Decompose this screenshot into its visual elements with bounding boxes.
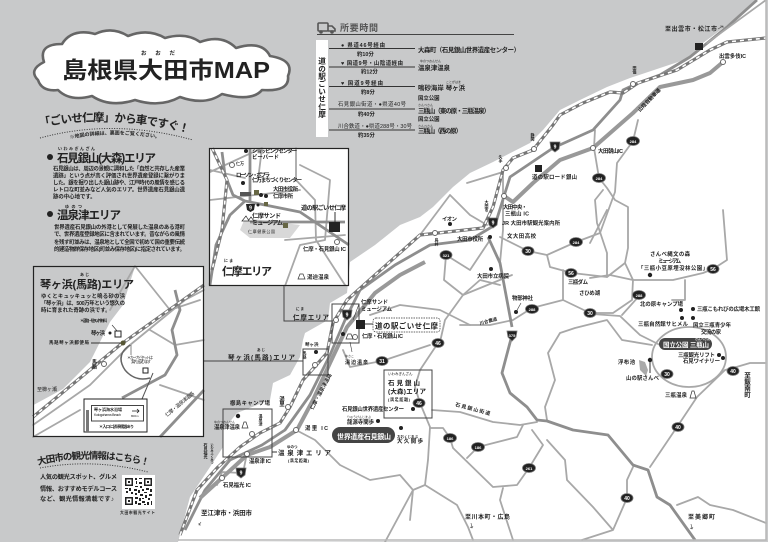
yunotsu labels: 至江津市・浜田市 — [201, 508, 252, 517]
route badges: 46 — [416, 401, 422, 407]
nima labels — [222, 147, 346, 281]
nima labels: 仁摩エリア — [222, 264, 272, 278]
panel: nima intro — [40, 112, 192, 253]
route badges: 56 — [568, 271, 574, 277]
iwami ginzan text: した。銀を掘り出した銀山跡や、江戸時代の風情を感じる — [53, 178, 185, 186]
oda labels: 久手 — [498, 154, 504, 164]
panel: kotogahama inset — [33, 266, 204, 437]
route badges: 9 — [554, 144, 557, 150]
route badges: 284 — [630, 139, 637, 144]
iwami ginzan area label: (満足距離) — [388, 396, 411, 402]
area locator boxes — [223, 304, 432, 457]
sanbe labels: ミュージアム — [658, 258, 682, 265]
nima labels: 仁摩サンド — [252, 212, 281, 220]
oda labels: 大田中央・ — [503, 203, 527, 211]
yunotsu text: 温泉津エリア — [57, 208, 121, 222]
iwami ginzan text: レトロな町並みなど人気のエリア。世界遺産石見銀山遺 — [53, 186, 186, 194]
origin column: 道の駅ごいせ仁摩 — [317, 56, 326, 119]
title ruby: おおだ — [141, 49, 175, 57]
oda labels: 至出雲市・松江市 — [665, 25, 717, 33]
sanbe labels: さんべ縄文の森 — [650, 250, 691, 258]
route 5: 川合鉄道・●県道288号・30号 — [338, 122, 413, 130]
kotogahama labels: ＊道路・駐P以外有料 — [80, 317, 107, 323]
route badges: 31 — [379, 359, 385, 365]
route badges: 375 — [509, 333, 516, 338]
connector lines — [204, 286, 332, 361]
tourism text: 人気の観光スポット、グルメ — [40, 473, 117, 481]
kotogahama callout: 800m — [131, 414, 139, 418]
nima labels: 道の駅ごいせ仁摩 — [301, 204, 346, 212]
route badges: 261 — [526, 466, 533, 471]
oda labels: 川合農道 — [479, 315, 498, 327]
sanbe labels — [618, 250, 761, 399]
kotogahama callout: ＊入口に誘導標識あり — [99, 423, 134, 429]
nima labels: 仁摩市所 — [273, 192, 294, 200]
route 1 — [341, 41, 520, 58]
nima labels: 大田市役所 — [273, 185, 299, 193]
nima main labels: 琴ヶ浜 — [305, 341, 319, 348]
yunotsu text: 世界遺産石見銀山の外港として発展した温泉のある港町 — [54, 223, 186, 231]
nima main labels — [278, 298, 403, 432]
route 5: 三瓶山（西の原） — [418, 126, 462, 135]
kotogahama labels: 琴ヶ浜(馬路)エリア — [40, 277, 134, 291]
title: 島根県大田市MAP — [62, 57, 270, 83]
yunotsu labels — [199, 399, 271, 525]
yunotsu labels: 石見福光 IC — [223, 481, 251, 489]
nima main labels: ミュージアム — [361, 306, 393, 313]
travel times — [316, 22, 520, 139]
iwami ginzan text: 遺跡」という点が高く評価され世界遺産登録に繋がりま — [53, 172, 185, 180]
kotogahama labels: 馬路 — [91, 358, 97, 370]
QR caption: 大田市観光サイト — [120, 510, 155, 515]
route 2: ゆのつおんせん — [420, 58, 441, 63]
oda labels: 大田市立病院 — [477, 272, 510, 280]
yunotsu labels: 石見福光 — [204, 443, 208, 460]
route badges: 30 — [664, 372, 670, 378]
sanbe pill: 国立公園 三瓶山 — [663, 340, 709, 349]
nima labels: 9 — [249, 206, 252, 212]
sanbe labels: 三瓶観光リフト — [678, 351, 715, 359]
iwami ginzan area label: いわみぎんざん — [388, 371, 413, 376]
oda labels: 大田朝山IC — [598, 147, 623, 155]
intro heading: 「ごいせ仁摩」から車ですぐ！ — [46, 112, 186, 132]
origin column — [316, 40, 328, 137]
nima labels: 仁摩健康公園 — [248, 228, 275, 234]
kotogahama labels: あ じ — [80, 271, 89, 277]
kotogahama labels: 馬路琴ヶ浜郵便局 — [49, 339, 90, 346]
yunotsu text: ゆのつ — [65, 203, 82, 209]
nima labels: 仁万まちづくりセンター — [252, 176, 302, 184]
panel: tourism info — [37, 450, 155, 515]
title cloud — [34, 30, 290, 103]
iwami ginzan text — [47, 145, 186, 200]
iwami ginzan text: 石見銀山(大森)エリア — [57, 151, 156, 165]
oda labels: 文大田高校 — [507, 232, 537, 240]
kotogahama labels: 琴ヶ浜 — [91, 329, 106, 337]
nima main labels: 仁摩・石見銀山 IC — [362, 332, 403, 340]
route 1: 約10分 — [357, 50, 374, 58]
nima labels: 仁万 — [236, 160, 244, 166]
kotogahama callout: Kotogahama Beach — [94, 413, 121, 417]
panel: nima inset — [210, 147, 349, 286]
nima main labels: 仁摩・温泉津道路 — [309, 372, 334, 411]
route badges: 186 — [447, 436, 454, 441]
oda labels: イオン — [442, 216, 458, 223]
nima labels: に ま — [224, 258, 233, 263]
kotogahama labels: 「琴ヶ浜」は、500万年という悠久の — [41, 299, 125, 307]
route 4: さんべさん — [418, 102, 433, 107]
route 4: 石見銀山街道・●県道40号 — [338, 100, 407, 108]
nima main labels: 湯里 IC — [305, 424, 328, 432]
sanbe labels: 三瓶温泉 — [665, 391, 688, 399]
route 3 — [341, 79, 466, 96]
label: yunotsu area: 温泉津エリア — [278, 448, 332, 457]
tourism heading: 大田市の観光情報はこちら！ — [37, 450, 146, 466]
sanbe labels: 交流の家 — [701, 328, 722, 336]
yunotsu text: を残す町並みは、温泉地として全国で初めて国の重要伝統 — [54, 238, 186, 246]
nima main labels: 湯迫温泉 — [345, 359, 368, 366]
sanbe labels: 「三瓶小豆原埋没林公園」 — [638, 264, 708, 272]
yunotsu text: 的建造物群保存地区(町並み保存地区)に指定されています。 — [54, 245, 185, 253]
label: nima area: 仁摩エリア — [293, 312, 330, 322]
route badges: 40 — [624, 496, 630, 502]
tourism text — [40, 473, 117, 503]
route 5: 約35分 — [358, 131, 375, 139]
route badges: 40 — [730, 369, 736, 375]
kotogahama labels — [37, 271, 196, 419]
oda labels: 鳥井 — [434, 237, 440, 247]
icon: car — [318, 23, 335, 33]
iwami ginzan text: 跡の中心地です。 — [53, 192, 96, 200]
yunotsu labels: 温泉津 — [258, 413, 264, 427]
iwami ginzan text: いわみぎんざん — [58, 145, 95, 151]
yunotsu text: で、世界遺産登録地区に含まれています。昔ながらの風情 — [54, 230, 186, 238]
label: kotogahama area — [228, 347, 296, 362]
oda labels: 至美郷町 — [688, 513, 715, 521]
kotogahama labels: ゆくとキュッキュッと鳴る砂の浜 — [41, 292, 126, 300]
michi-no-eki gosei nima: 道の駅ごいせ仁摩 — [375, 320, 438, 330]
road network — [180, 0, 766, 542]
oda labels: 三瓶ダム — [568, 278, 589, 286]
route 4: 約40分 — [358, 110, 375, 118]
yunotsu labels: 温泉津温泉 — [214, 423, 241, 431]
label: yunotsu area — [272, 444, 332, 463]
route badges: 30 — [587, 311, 593, 317]
iwami ginzan area label: (大森)エリア — [388, 386, 426, 396]
nima labels: 湯迫温泉 — [307, 273, 330, 281]
route 3: ことがはま — [446, 79, 461, 84]
route 1: 大森町（石見銀山世界遺産センター） — [418, 45, 520, 54]
route 4: 国立公園 — [418, 94, 440, 102]
nima labels: ショッピングセンター — [252, 147, 297, 155]
oda labels: 大田市 — [484, 199, 490, 213]
route 4 — [338, 94, 490, 118]
route 5 — [338, 115, 462, 139]
route 5: 国立公園 — [418, 115, 440, 123]
oda labels: JR 大田市駅観光案内所 — [502, 219, 561, 227]
sanbe labels: 北の原キャンプ場 — [640, 300, 684, 308]
kotogahama labels: ＊カーナビセットは — [127, 354, 153, 360]
sanbe labels: 至飯南町 — [742, 372, 751, 398]
iwami ginzan area label: おおくじまぶ — [397, 434, 418, 439]
nima labels: 仁摩・石見銀山 IC — [303, 245, 346, 253]
sanbe labels: 石見ワイナリー — [683, 358, 720, 365]
yunotsu labels: 櫛島キャンプ場 — [230, 399, 271, 407]
route badges: 56 — [710, 267, 716, 273]
label: yunotsu area: ゆのつ — [287, 444, 298, 449]
land — [178, 0, 766, 542]
oda labels: 物部神社 — [512, 294, 534, 302]
oda labels: 至川本町・広島 — [465, 513, 510, 521]
nima labels: ミュージアム — [252, 220, 283, 227]
route 3: 約8分 — [361, 88, 375, 96]
iwami ginzan text: 石見銀山は、周辺の景観に調和した「自然と共存した産業 — [53, 164, 186, 172]
route 5: さんべさん — [418, 123, 433, 128]
yunotsu labels: 温泉津 IC — [249, 457, 271, 465]
michi-no-eki gosei nima — [356, 318, 440, 332]
oda labels — [434, 25, 746, 529]
oda labels: 山陰自動車道 — [636, 87, 662, 113]
nima main labels: 馬路 — [302, 350, 308, 360]
kotogahama labels: 時に育まれた奇跡の浜です。 — [41, 306, 111, 314]
nima main labels: ゆさこ — [345, 353, 354, 358]
oda labels: さひめ湖 — [579, 289, 601, 297]
nima labels: ローソン・ポプラ — [236, 171, 270, 179]
route badges: 288 — [529, 307, 536, 312]
nima main labels: 仁摩サンド — [361, 298, 388, 306]
iwami ginzan area label: 石見銀山街道 — [454, 401, 491, 417]
oda labels: 三瓶山 IC — [505, 210, 529, 218]
sanbe labels: 浮布池 — [618, 358, 636, 366]
route badges: 284 — [573, 240, 580, 245]
route 2: 温泉津温泉 — [418, 63, 451, 72]
label: kotogahama area: 琴ヶ浜(馬路)エリア — [228, 352, 296, 362]
route badges: 46 — [435, 341, 441, 347]
sanbe labels: 国立三瓶青少年 — [693, 321, 732, 329]
oda labels: 静間 — [530, 132, 536, 142]
world heritage pill — [332, 427, 395, 443]
tourism text: 情報、おすすめモデルコース — [40, 485, 117, 493]
route 3: 鳴砂海岸 琴ヶ浜 — [418, 83, 466, 92]
note: ※地図の詳細は、裏面をご覧ください。 — [70, 130, 157, 139]
route badges: 186 — [475, 445, 482, 450]
tourism text: など、観光情報満載です♪ — [40, 495, 114, 503]
route 3: ♥ 国道9号経由 — [341, 79, 383, 87]
kotogahama callout: 琴ヶ浜海水浴場 — [94, 406, 122, 412]
iwami ginzan area label: 石見銀山世界遺産センター — [342, 405, 404, 413]
sanbe pill: さんべさん — [695, 336, 710, 341]
label: nima area: に ま — [296, 306, 304, 311]
yunotsu text — [47, 203, 186, 253]
nima labels: ビーバード — [252, 153, 279, 161]
oda labels: 大田市役所 — [457, 235, 484, 243]
kotogahama labels: 仁摩・温泉津道路 — [164, 390, 196, 419]
nima main labels: 湯里 — [278, 395, 285, 407]
route 4: 三瓶山（東の原・三瓶温泉） — [418, 106, 490, 115]
iwami ginzan area label: 大久間歩 — [397, 437, 424, 445]
world heritage pill: 世界遺産石見銀山 — [337, 432, 391, 441]
route badges — [236, 136, 739, 502]
oda labels: 出雲多伎IC — [719, 52, 746, 60]
kotogahama labels: 案内上戻ります — [131, 358, 151, 364]
route badges: 288 — [636, 293, 643, 298]
route 2: 約12分 — [361, 68, 378, 76]
route badges: 30 — [525, 249, 531, 255]
route badges: 40 — [675, 425, 681, 431]
oda labels: 道の駅ロード銀山 — [532, 173, 577, 181]
kotogahama sea — [34, 266, 135, 405]
route badges: 9 — [240, 470, 243, 476]
route badges: 9 — [492, 220, 495, 226]
route 1: ● 県道46号経由 — [341, 41, 385, 49]
kotogahama labels: 至櫛ヶ瀬 — [37, 386, 57, 393]
iwami ginzan area label: 龍源寺間歩 — [347, 418, 375, 426]
sanbe labels: 三瓶こもれびの広場木工館 — [697, 305, 761, 313]
route badges: 321 — [443, 253, 450, 258]
label: kotogahama area: あ じ — [257, 347, 265, 352]
travel heading: 所要時間 — [340, 22, 378, 33]
label: nima area — [293, 306, 330, 322]
page edge — [178, 0, 766, 540]
route 2: ♥ 国道9号・山陰道経由 — [341, 59, 403, 67]
sanbe pill — [659, 336, 712, 350]
oda labels: 田儀 — [632, 66, 638, 75]
label: yunotsu area: (満足距離) — [288, 457, 310, 463]
yunotsu labels: いわみふくみつ — [210, 443, 214, 464]
sanbe labels: 山の駅さんべ — [626, 374, 660, 382]
route badges: 9 — [346, 312, 349, 318]
yunotsu labels: ゆのつおんせん — [214, 419, 235, 424]
route 2 — [341, 58, 451, 76]
iwami ginzan area label: りゅうげんじまぶ — [347, 414, 371, 419]
route badges: 284 — [596, 176, 603, 181]
iwami ginzan area label: 石見銀山 — [388, 378, 420, 387]
kotogahama callout — [84, 399, 147, 432]
iwami ginzan area label — [342, 371, 491, 445]
sanbe labels: 三瓶自然館サヒメル — [638, 320, 689, 328]
